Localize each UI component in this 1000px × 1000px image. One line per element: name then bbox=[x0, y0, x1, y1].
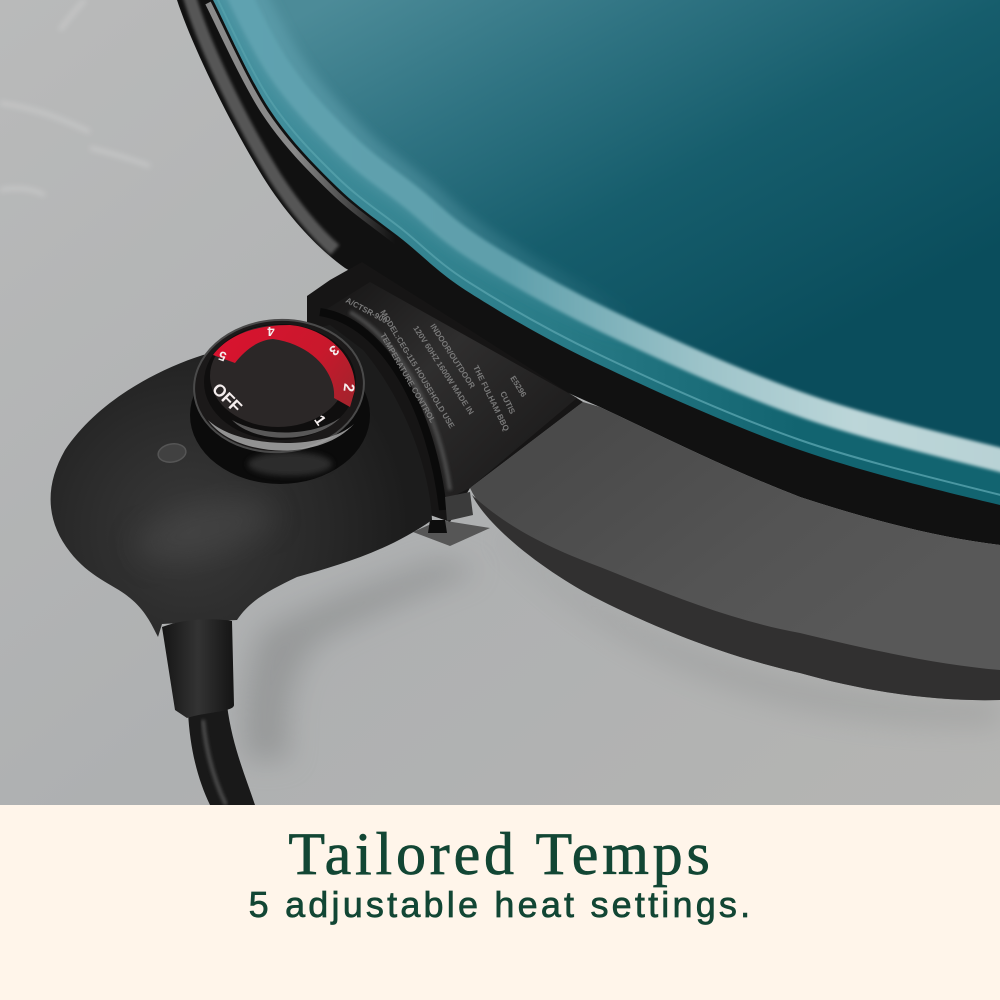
side handle grey band bbox=[470, 402, 1000, 700]
dial numbers bbox=[208, 324, 357, 429]
dial numbers: 3 bbox=[326, 342, 343, 359]
label bracket with embossed text: 120V 60HZ 1600W MADE IN bbox=[411, 324, 476, 417]
dial numbers: 1 bbox=[310, 412, 329, 429]
small indicator nub bbox=[157, 442, 187, 464]
lid wide soft band bbox=[227, 0, 1000, 471]
label bracket with embossed text: MODEL:CEG-115 HOUSEHOLD USE bbox=[378, 308, 457, 431]
dial numbers: 5 bbox=[216, 348, 228, 365]
label bracket with embossed text: CUTIS bbox=[498, 390, 517, 416]
grill outer black base bbox=[177, 0, 1000, 545]
lid light stripe bbox=[221, 0, 1000, 472]
teal lid surface bbox=[245, 0, 1000, 475]
base grey edge band bbox=[189, 0, 335, 250]
dial glare bbox=[208, 420, 354, 451]
label bracket with embossed text: THE FULHAM BBQ bbox=[471, 364, 511, 433]
clip under bracket bbox=[413, 492, 490, 546]
red temperature arc bbox=[213, 325, 355, 407]
dial numbers: 2 bbox=[340, 382, 357, 393]
body soft highlight bbox=[131, 487, 279, 573]
heading: Tailored Temps bbox=[288, 821, 714, 887]
power cord bbox=[188, 705, 255, 805]
label bracket with embossed text bbox=[307, 262, 583, 522]
label bracket with embossed text: E5296 bbox=[508, 374, 528, 399]
label bracket with embossed text: TEMPERATURE CONTROL bbox=[378, 332, 437, 424]
cord strain relief collar bbox=[162, 619, 234, 718]
caption banner bbox=[0, 805, 1000, 1000]
handle dark lower lip bbox=[472, 495, 1000, 700]
label bracket with embossed text: A/CTSR-900 bbox=[344, 296, 389, 326]
dial numbers: OFF bbox=[208, 379, 246, 417]
dial numbers: 4 bbox=[267, 324, 275, 339]
metal sliver beside rim bbox=[208, 3, 398, 243]
subheading: 5 adjustable heat settings. bbox=[249, 884, 753, 925]
label bracket with embossed text: INDOOR/OUTDOOR bbox=[428, 322, 477, 390]
thermostat probe body bbox=[51, 325, 432, 637]
heat dial bbox=[190, 314, 370, 484]
rim thin highlight bbox=[213, 0, 1000, 505]
teal lid rim bbox=[213, 0, 1000, 505]
